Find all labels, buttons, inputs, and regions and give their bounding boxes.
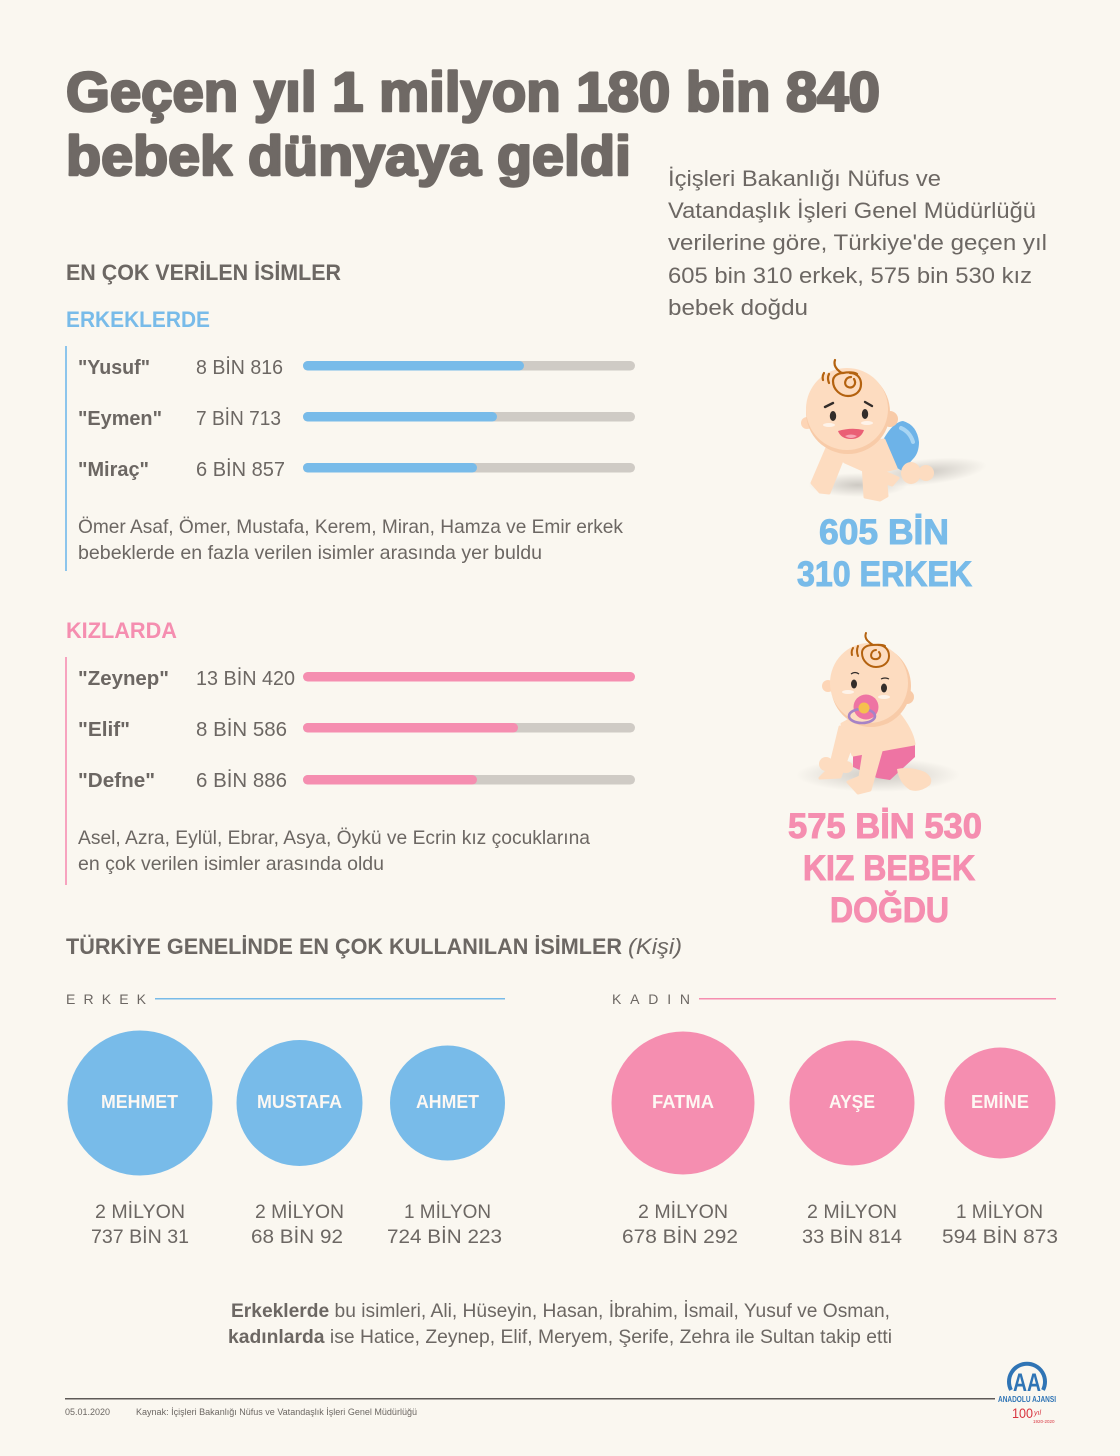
bubble: Ayşe: 2 MİLYON [807,1200,897,1223]
footer: date and source: Kaynak: İçişleri Bakanlığı Nüfus ve Vatandaşlık İşleri Genel Müdürlüğü [136,1407,417,1417]
heading: most used names in Turkey: TÜRKİYE GENELİNDE EN ÇOK KULLANILAN İSİMLER [66,934,622,959]
bubble: Ahmet: 1 MİLYON [404,1200,491,1223]
summary text: Erkeklerde bu isimleri, Ali, Hüseyin, Hasan, İbrahim, İsmail, Yusuf ve Osman, [231,1299,890,1322]
bar row: Elif [78,718,635,741]
bubble: Emine: 594 BİN 873 [942,1225,1058,1248]
bar row: Zeynep: 13 BİN 420 [196,667,295,690]
heading: most used names in Turkey: (Kişi) [628,934,682,959]
legend: women: KADIN [612,991,690,1007]
note: girls: en çok verilen isimler arasında oldu [78,853,384,875]
heading: most given names: EN ÇOK VERİLEN İSİMLER [66,260,341,285]
bubble: Ahmet: 724 BİN 223 [387,1225,502,1248]
bubble: Mehmet: MEHMET [101,1092,178,1112]
stat: boys total: 605 BİN [819,513,949,552]
logo: Anadolu Ajansi: 1920-2020 [1033,1419,1055,1424]
bubble: Ayşe [790,1040,914,1248]
bubble: Mustafa: 68 BİN 92 [251,1225,343,1248]
bubble: Emine: EMİNE [971,1092,1029,1112]
intro text block: İçişleri Bakanlığı Nüfus ve [668,166,941,191]
bubble: Mehmet: 737 BİN 31 [91,1225,189,1248]
note: boys: Ömer Asaf, Ömer, Mustafa, Kerem, Miran, Hamza ve Emir erkek [78,516,623,538]
bubble: Ayşe: AYŞE [829,1092,875,1112]
footer: date and source: 05.01.2020 [65,1407,110,1417]
note: boys [78,516,623,564]
bubble: Emine: 1 MİLYON [956,1200,1043,1223]
bubble: Fatma: 678 BİN 292 [622,1225,738,1248]
note: girls: Asel, Azra, Eylül, Ebrar, Asya, Öykü ve Ecrin kız çocuklarına [78,827,590,849]
intro text block: Vatandaşlık İşleri Genel Müdürlüğü [668,198,1036,223]
bubble: Ahmet [387,1046,505,1248]
stat: girls total: 575 BİN 530 [788,807,982,846]
bar row: Miraç [78,458,635,481]
title: Geçen yıl 1 milyon 180 bin 840 [66,60,880,123]
bar row: Yusuf: 8 BİN 816 [196,356,283,379]
intro text block: verilerine göre, Türkiye'de geçen yıl [668,230,1047,255]
bar row: Eymen: 7 BİN 713 [196,407,281,430]
bubble: Fatma [612,1032,754,1248]
bar row: Elif: "Elif" [78,719,130,741]
bubble: Mustafa [236,1040,362,1248]
bar row: Zeynep: "Zeynep" [78,668,169,690]
bubble: Fatma: FATMA [652,1092,714,1112]
logo: Anadolu Ajansi [998,1364,1056,1424]
bar row: Defne: 6 BİN 886 [196,769,287,792]
stat: girls total: DOĞDU [830,890,949,930]
heading: boys: ERKEKLERDE [66,307,210,332]
bar row: Yusuf: "Yusuf" [78,357,150,379]
bubble: Emine [942,1048,1058,1248]
bubble: Ahmet: AHMET [416,1092,479,1112]
intro text block [668,166,1047,320]
title: bebek dünyaya geldi [66,124,631,187]
bar row: Eymen [78,407,635,430]
bar row: Miraç: "Miraç" [78,459,149,481]
bar row: Miraç: 6 BİN 857 [196,458,285,481]
bubble: Fatma: 2 MİLYON [638,1200,728,1223]
logo: Anadolu Ajansi: ANADOLU AJANSI [998,1394,1056,1404]
legend: men: ERKEK [66,991,147,1007]
bar row: Yusuf [78,356,635,379]
logo: Anadolu Ajansi: 100 [1012,1405,1033,1421]
summary text: kadınlarda ise Hatice, Zeynep, Elif, Meryem, Şerife, Zehra ile Sultan takip etti [228,1326,892,1348]
heading: girls: KIZLARDA [66,618,177,643]
panel: girls names [65,618,635,885]
icon: sitting baby girl [796,633,960,793]
stat: girls total [788,807,982,930]
bar row: Defne: "Defne" [78,770,155,792]
bubble: Mehmet: 2 MİLYON [95,1200,185,1223]
bubble: Ayşe: 33 BİN 814 [802,1225,902,1248]
bubble: Mehmet [68,1030,212,1248]
stat: boys total: 310 ERKEK [797,555,972,594]
icon: crawling baby boy [801,360,988,500]
bar row: Eymen: "Eymen" [78,408,162,430]
intro text block: bebek doğdu [668,295,808,320]
stat: girls total: KIZ BEBEK [803,849,975,888]
stat: boys total [797,513,972,594]
bar row: Zeynep [78,667,635,690]
logo: Anadolu Ajansi: AA [1013,1369,1041,1397]
panel: boys names [65,307,635,571]
note: boys: bebeklerde en fazla verilen isimler arasında yer buldu [78,542,542,564]
intro text block: 605 bin 310 erkek, 575 bin 530 kız [668,263,1032,288]
bubble: Mustafa: 2 MİLYON [255,1200,344,1223]
note: girls [78,827,590,875]
bar row: Defne [78,769,635,792]
logo: Anadolu Ajansi: yıl [1033,1410,1041,1417]
summary text [228,1299,892,1348]
title [66,60,880,187]
bubble: Mustafa: MUSTAFA [257,1092,342,1112]
bar row: Elif: 8 BİN 586 [196,718,287,741]
